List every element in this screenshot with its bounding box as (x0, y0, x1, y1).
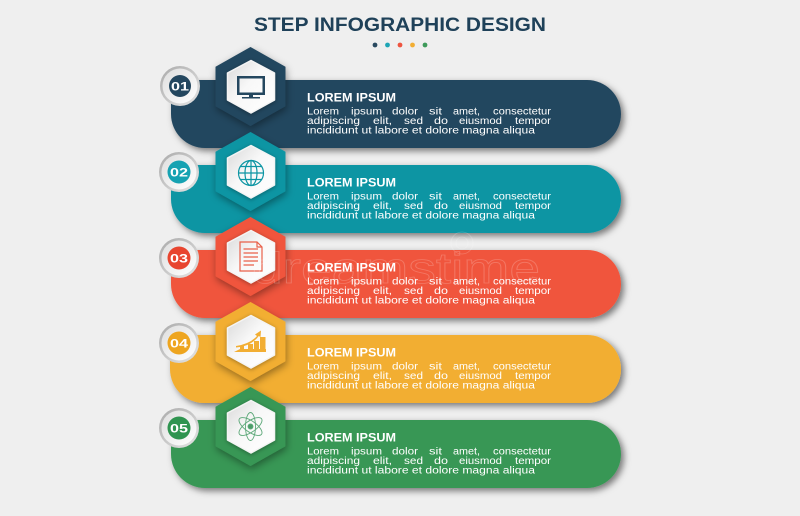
step 04 body text: consectetur (493, 361, 552, 372)
icon: globe (238, 160, 264, 186)
panel bar 01 (171, 80, 621, 148)
number badge 01: 01 (171, 80, 189, 94)
step 05 body text: eiusmod (459, 456, 502, 467)
number badge 02 (159, 152, 199, 192)
step 05 heading: LOREM IPSUM (307, 430, 396, 444)
step 04 body text: adipiscing (307, 371, 360, 382)
step 03 body text: elit, (373, 286, 392, 297)
step 01 body text: consectetur (493, 106, 552, 117)
step 01 heading: LOREM IPSUM (307, 90, 396, 104)
step 04 body text: eiusmod (459, 371, 502, 382)
panel bar 02 (171, 165, 621, 233)
step 01 body text: sit (429, 106, 442, 117)
watermark: dreamstime (252, 244, 540, 293)
step 01 body text: sed (404, 116, 423, 127)
step 02 body text (307, 191, 552, 221)
number badge 03: 03 (170, 252, 188, 266)
step 03 (159, 218, 621, 318)
step 02 heading: LOREM IPSUM (307, 176, 396, 190)
icon: growth chart (234, 330, 266, 352)
hexagon 02 (216, 132, 285, 210)
step 02 body text: amet, (453, 191, 480, 202)
step 04 body text: elit, (373, 371, 392, 382)
number badge 04 (159, 323, 199, 363)
step 01 (160, 48, 621, 148)
decorative dots under title (373, 43, 427, 47)
step 01 body text: eiusmod (459, 116, 502, 127)
step 03 body text: dolor (392, 276, 419, 287)
panel bar 03 (171, 250, 621, 318)
step 05 body text: elit, (373, 456, 392, 467)
step 03 body text: sed (404, 286, 423, 297)
step 05 body text: amet, (453, 446, 480, 457)
step 01 body text: ipsum (351, 106, 382, 117)
step 01 body text: adipiscing (307, 116, 360, 127)
step 04 body text: Lorem (307, 361, 339, 372)
step 01 body text: elit, (373, 116, 392, 127)
step 03 body text: ipsum (351, 276, 382, 287)
step 04 body text: do (434, 371, 449, 382)
icon: atom (236, 412, 265, 440)
step 04 (159, 302, 621, 403)
hexagon 05 (216, 388, 285, 466)
step 02 (159, 132, 621, 233)
panel bar 04 (170, 335, 621, 403)
watermark (252, 232, 540, 293)
step 02 body text: consectetur (493, 191, 552, 202)
step 04 body text: incididunt ut labore et dolore magna aliqua (307, 380, 536, 391)
step 05 body text: Lorem (307, 446, 339, 457)
step 04 heading: LOREM IPSUM (307, 346, 396, 360)
step 03 body text: sit (429, 276, 442, 287)
step 05 body text (307, 446, 552, 476)
step 03 body text: Lorem (307, 276, 339, 287)
step 04 body text (307, 361, 552, 391)
step 03 body text: amet, (453, 276, 480, 287)
hexagon 01 (216, 48, 285, 126)
step 01 body text: Lorem (307, 106, 339, 117)
step 04 body text: sed (404, 371, 423, 382)
icon: document (240, 242, 262, 271)
step 02 body text: do (434, 201, 449, 212)
step 02 body text: elit, (373, 201, 392, 212)
step 01 body text (307, 106, 552, 136)
number badge 05: 05 (170, 422, 188, 436)
step 03 body text: eiusmod (459, 286, 502, 297)
hexagon 04 (216, 302, 285, 380)
step 02 body text: Lorem (307, 191, 339, 202)
step 04 body text: tempor (515, 371, 552, 382)
step 02 body text: adipiscing (307, 201, 360, 212)
step 02 body text: sit (429, 191, 442, 202)
number badge 05 (159, 408, 199, 448)
step 01 body text: do (434, 116, 449, 127)
step 05 body text: tempor (515, 456, 552, 467)
panel bar 05 (171, 420, 621, 488)
title: STEP INFOGRAPHIC DESIGN (254, 15, 546, 36)
step 04 body text: amet, (453, 361, 480, 372)
step 02 body text: dolor (392, 191, 419, 202)
step 01 body text: tempor (515, 116, 552, 127)
step 04 body text: ipsum (351, 361, 382, 372)
step 05 body text: sed (404, 456, 423, 467)
step 03 body text: incididunt ut labore et dolore magna aliqua (307, 295, 536, 306)
step 02 body text: eiusmod (459, 201, 502, 212)
icon: monitor (237, 76, 265, 98)
step 02 body text: incididunt ut labore et dolore magna aliqua (307, 210, 536, 221)
step 03 body text: consectetur (493, 276, 552, 287)
number badge 02: 02 (170, 166, 188, 180)
step 03 heading: LOREM IPSUM (307, 260, 396, 274)
step 05 body text: sit (429, 446, 442, 457)
step 05 body text: ipsum (351, 446, 382, 457)
step 03 body text: tempor (515, 286, 552, 297)
step 01 body text: incididunt ut labore et dolore magna aliqua (307, 125, 536, 136)
hexagon 03 (216, 218, 285, 296)
number badge 04: 04 (170, 336, 188, 350)
step 03 body text: adipiscing (307, 286, 360, 297)
step 05 (159, 388, 621, 488)
step 05 body text: do (434, 456, 449, 467)
step 01 body text: dolor (392, 106, 419, 117)
step 05 body text: adipiscing (307, 456, 360, 467)
step 02 body text: ipsum (351, 191, 382, 202)
step 04 body text: dolor (392, 361, 419, 372)
number badge 01 (160, 66, 200, 106)
number badge 03 (159, 238, 199, 278)
step 02 body text: tempor (515, 201, 552, 212)
step 03 body text (307, 276, 552, 306)
step 02 body text: sed (404, 201, 423, 212)
step 05 body text: dolor (392, 446, 419, 457)
step 05 body text: incididunt ut labore et dolore magna aliqua (307, 465, 536, 476)
step 04 body text: sit (429, 361, 442, 372)
step 01 body text: amet, (453, 106, 480, 117)
step 05 body text: consectetur (493, 446, 552, 457)
step 03 body text: do (434, 286, 449, 297)
